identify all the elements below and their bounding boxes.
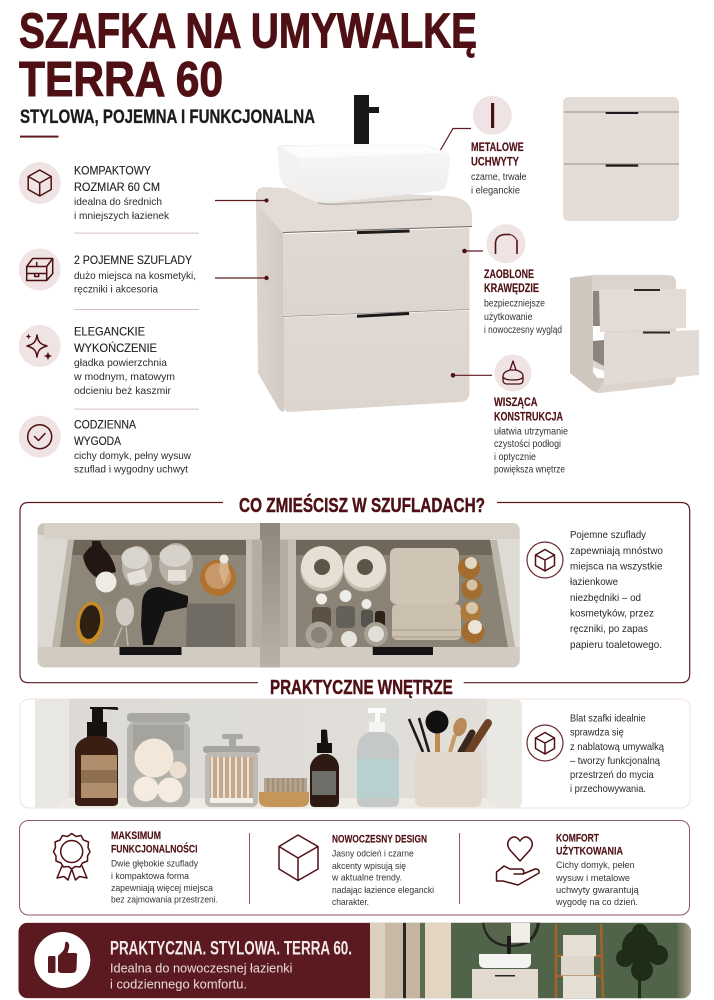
title: TERRA 60 (19, 53, 223, 107)
cabinet open drawers view (570, 275, 699, 393)
benefit: comfort: KOMFORT (556, 832, 599, 844)
text: drawers description: miejsca na wszystkie (570, 560, 663, 572)
callout: wall-hung construction: ułatwia utrzymanie (494, 427, 568, 438)
text: worktop description: Blat szafki idealnie (570, 713, 646, 725)
section heading: CO ZMIEŚCISZ W SZUFLADACH? (239, 493, 485, 517)
benefit: maximum functionality: FUNKCJONALNOŚCI (111, 843, 198, 856)
callout: wall-hung construction: WISZĄCA (494, 397, 538, 409)
text: drawers description (570, 529, 663, 651)
feature: compact size: i mniejszych łazienek (74, 210, 170, 222)
banner text: i codziennego komfortu. (110, 976, 247, 991)
text: worktop description: i przechowywania. (570, 783, 646, 795)
text: drawers description: Pojemne szuflady (570, 529, 647, 541)
callout: rounded edges: KRAWĘDZIE (484, 283, 539, 295)
panel: benefits (20, 820, 690, 915)
feature: compact size: idealna do średnich (74, 196, 162, 208)
callout: wall-hung construction (451, 354, 568, 476)
photo: shelf (35, 699, 522, 808)
title (19, 4, 477, 107)
text: worktop description: z nablatową umywalką (570, 741, 664, 753)
upper drawer (283, 228, 470, 316)
callout: metal handles: UCHWYTY (471, 157, 519, 169)
benefit: maximum functionality: zapewniają więcej miejsca (111, 883, 214, 894)
feature: elegant finish: gładka powierzchnia (74, 357, 167, 369)
banner text: PRAKTYCZNA. STYLOWA. TERRA 60. (110, 937, 352, 959)
callout: rounded edges: użytkowanie (484, 312, 533, 323)
banner photo: bathroom (370, 922, 691, 999)
benefit: modern design: NOWOCZESNY DESIGN (332, 833, 427, 845)
callout: rounded edges: bezpieczniejsze (484, 299, 545, 310)
text: drawers description: niezbędniki – od (570, 592, 641, 604)
feature: everyday comfort: WYGODA (74, 434, 121, 448)
benefit: maximum functionality: Dwie głębokie szuflady (111, 859, 198, 870)
callout: wall-hung construction: i optycznie (494, 452, 536, 463)
faucet (354, 95, 379, 144)
feature: elegant finish (19, 325, 175, 397)
feature: everyday comfort: cichy domyk, pełny wysuw (74, 450, 191, 462)
benefit: maximum functionality: i kompaktowa forma (111, 871, 190, 882)
main product: cabinet with basin (256, 95, 472, 412)
text: worktop description (570, 713, 664, 795)
cabinet side (256, 187, 284, 412)
feature: compact size: KOMPAKTOWY (74, 164, 151, 178)
drawer items right (300, 546, 484, 648)
text: drawers description: ręczniki, po zapas (570, 623, 648, 635)
feature: elegant finish: ELEGANCKIE (74, 325, 145, 339)
panel: drawers section (20, 493, 690, 683)
drawer items left (74, 541, 236, 647)
text: drawers description: papieru toaletowego. (570, 639, 662, 651)
benefit: modern design: charakter. (332, 897, 369, 908)
callout: metal handles: czarne, trwałe (471, 172, 527, 183)
basin (277, 144, 450, 204)
feature: two drawers (19, 248, 196, 296)
benefit: comfort: wygodę na co dzień. (555, 897, 638, 908)
callout: rounded edges: i nowoczesny wygląd (484, 325, 562, 336)
feature: two drawers: 2 POJEMNE SZUFLADY (74, 253, 192, 267)
section heading: PRAKTYCZNE WNĘTRZE (270, 677, 453, 699)
clear pump bottle (357, 708, 399, 807)
callout: wall-hung construction: KONSTRUKCJA (494, 412, 563, 424)
title: SZAFKA NA UMYWALKĘ (19, 4, 477, 58)
callout: wall-hung construction: czystości podłogi (494, 439, 561, 450)
panel: practical interior (20, 677, 690, 808)
cabinet top (258, 187, 472, 233)
benefit: comfort: wysuw i metalowe (555, 873, 630, 884)
benefit: comfort: UŻYTKOWANIA (556, 844, 623, 857)
feature: compact size (19, 162, 170, 222)
leader lines to left features (215, 198, 269, 280)
photo: open drawers (38, 523, 520, 668)
benefit: comfort (496, 832, 639, 908)
banner (18, 922, 691, 999)
benefit: comfort: Cichy domyk, pełen (556, 860, 635, 871)
section frame (20, 699, 690, 808)
benefit: modern design: akcenty wpisują się (332, 861, 406, 872)
callout: metal handles: i eleganckie (471, 185, 520, 196)
feature: everyday comfort: CODZIENNA (74, 418, 136, 432)
feature: two drawers: ręczniki i akcesoria (74, 284, 158, 296)
handles (357, 231, 410, 233)
glass jar with cotton buds (203, 734, 260, 807)
feature: compact size: ROZMIAR 60 CM (74, 180, 160, 194)
callout: rounded edges (462, 224, 562, 336)
lower drawer (284, 310, 470, 412)
benefit: maximum functionality (54, 830, 218, 905)
callout: rounded edges: ZAOBLONE (484, 269, 534, 281)
text: drawers description: łazienkowe (570, 576, 618, 588)
banner text: Idealna do nowoczesnej łazienki (110, 961, 293, 976)
makeup brushes in cup (409, 710, 488, 807)
text: worktop description: sprawdza się (570, 727, 624, 739)
text: drawers description: kosmetyków, przez (570, 608, 654, 620)
callout: wall-hung construction: powiększa wnętrze (494, 465, 565, 476)
text: worktop description: przestrzeń do mycia (570, 769, 654, 781)
feature: everyday comfort: szuflad i wygodny uchwyt (74, 464, 188, 476)
text: worktop description: – tworzy funkcjonalną (570, 755, 660, 767)
callout: metal handles (440, 96, 527, 196)
subtitle: STYLOWA, POJEMNA I FUNKCJONALNA (20, 107, 315, 128)
icon: box (527, 542, 563, 578)
benefit: comfort: uchwyty gwarantują (556, 885, 639, 896)
glass jar with cotton pads (127, 713, 190, 807)
benefit: maximum functionality: MAKSIMUM (111, 830, 161, 842)
benefit: maximum functionality: bez zajmowania przestrzeni. (111, 894, 218, 905)
feature: elegant finish: odcieniu beż kaszmir (74, 385, 171, 397)
feature: elegant finish: WYKOŃCZENIE (74, 340, 157, 355)
feature: elegant finish: w modnym, matowym (73, 371, 175, 383)
pump bottle (75, 707, 118, 806)
cabinet front view (563, 97, 679, 221)
icon: thumbs up (34, 932, 90, 988)
benefit: modern design: Jasny odcień i czarne (332, 849, 414, 860)
wooden brush (259, 778, 309, 807)
benefit: modern design (279, 833, 434, 908)
feature: everyday comfort (19, 416, 191, 476)
callout: metal handles: METALOWE (471, 142, 524, 154)
dropper bottle (310, 730, 339, 807)
banner text (110, 937, 352, 991)
text: drawers description: zapewniają mnóstwo (570, 545, 663, 557)
benefit: modern design: nadając łazience elegancki (332, 885, 434, 896)
section frame (20, 502, 690, 683)
benefit: modern design: w aktualne trendy. (331, 873, 402, 884)
feature: two drawers: dużo miejsca na kosmetyki, (74, 270, 196, 282)
icon: box (527, 725, 563, 761)
panel: left features (19, 162, 199, 476)
